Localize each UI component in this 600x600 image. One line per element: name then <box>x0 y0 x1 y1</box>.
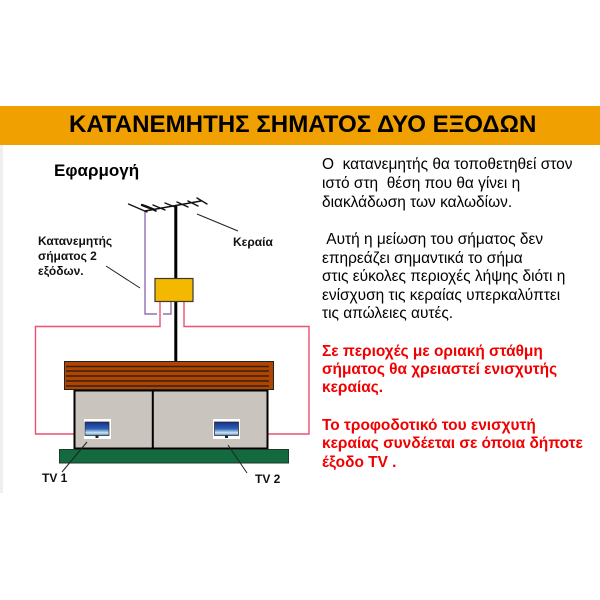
pointer: antenna <box>197 214 238 231</box>
icon: TV 2 <box>213 419 240 439</box>
label: antenna: Κεραία <box>233 235 273 249</box>
text: splitter placement: διακλάδωση των καλωδίων. <box>322 194 512 211</box>
antenna <box>128 198 207 212</box>
cable: purple antenna lead <box>145 211 171 314</box>
text: signal reduction: ενίσχυση τις κεραίας υπερκαλύπτει <box>322 287 560 304</box>
label: splitter: σήματος 2 <box>38 249 97 263</box>
text: signal reduction: επηρεάζει σημαντικά το σήμα <box>322 250 523 267</box>
label: TV 2: TV 2 <box>255 472 280 486</box>
antenna mast <box>174 205 177 362</box>
icon: TV 1 <box>84 419 111 439</box>
roof <box>64 362 274 390</box>
title: ΚΑΤΑΝΕΜΗΤΗΣ ΣΗΜΑΤΟΣ ΔΥΟ ΕΞΟΔΩΝ <box>69 111 536 138</box>
text: amplifier power note <box>322 417 583 471</box>
text: splitter placement: ιστό στη θέση που θα γίνει η <box>322 175 520 192</box>
text: signal reduction: Αυτή η μείωση του σήματος δεν <box>326 231 543 248</box>
interior wall <box>152 391 154 449</box>
text: marginal signal warning: Σε περιοχές με οριακή στάθμη <box>322 342 543 360</box>
label: TV 1: TV 1 <box>42 471 67 485</box>
heading: application: Εφαρμογή <box>54 160 139 180</box>
text: signal reduction <box>322 231 565 322</box>
label: splitter: εξόδων. <box>38 264 84 278</box>
text: amplifier power note: Το τροφοδοτικό του ενισχυτή <box>322 417 536 434</box>
label: splitter: Κατανεμητής <box>38 234 112 248</box>
ground base <box>60 450 288 463</box>
pointer: splitter <box>106 266 140 288</box>
title banner <box>0 106 600 145</box>
pointer: TV 2 <box>228 445 247 473</box>
text: marginal signal warning: σήματος θα χρειαστεί ενισχυτής <box>322 361 557 378</box>
label: splitter <box>38 234 112 278</box>
text: marginal signal warning <box>322 342 557 396</box>
pointer: TV 1 <box>62 442 87 472</box>
text: splitter placement <box>322 156 572 211</box>
text: amplifier power note: κεραίας συνδέεται σε όποια δήποτε <box>322 435 583 452</box>
cable: pink line to TV 1 <box>36 302 160 434</box>
text: splitter placement: Ο κατανεμητής θα τοποθετηθεί στον <box>322 156 572 173</box>
text: marginal signal warning: κεραίας. <box>322 379 383 396</box>
cable: pink line to TV 2 <box>184 302 309 434</box>
text: signal reduction: στις εύκολες περιοχές λήψης διότι η <box>322 268 565 285</box>
house walls <box>74 390 268 448</box>
left edge strip <box>0 145 3 493</box>
text: amplifier power note: έξοδο TV . <box>322 454 396 471</box>
text: signal reduction: τις απώλειες αυτές. <box>322 305 453 322</box>
splitter box <box>155 278 193 302</box>
